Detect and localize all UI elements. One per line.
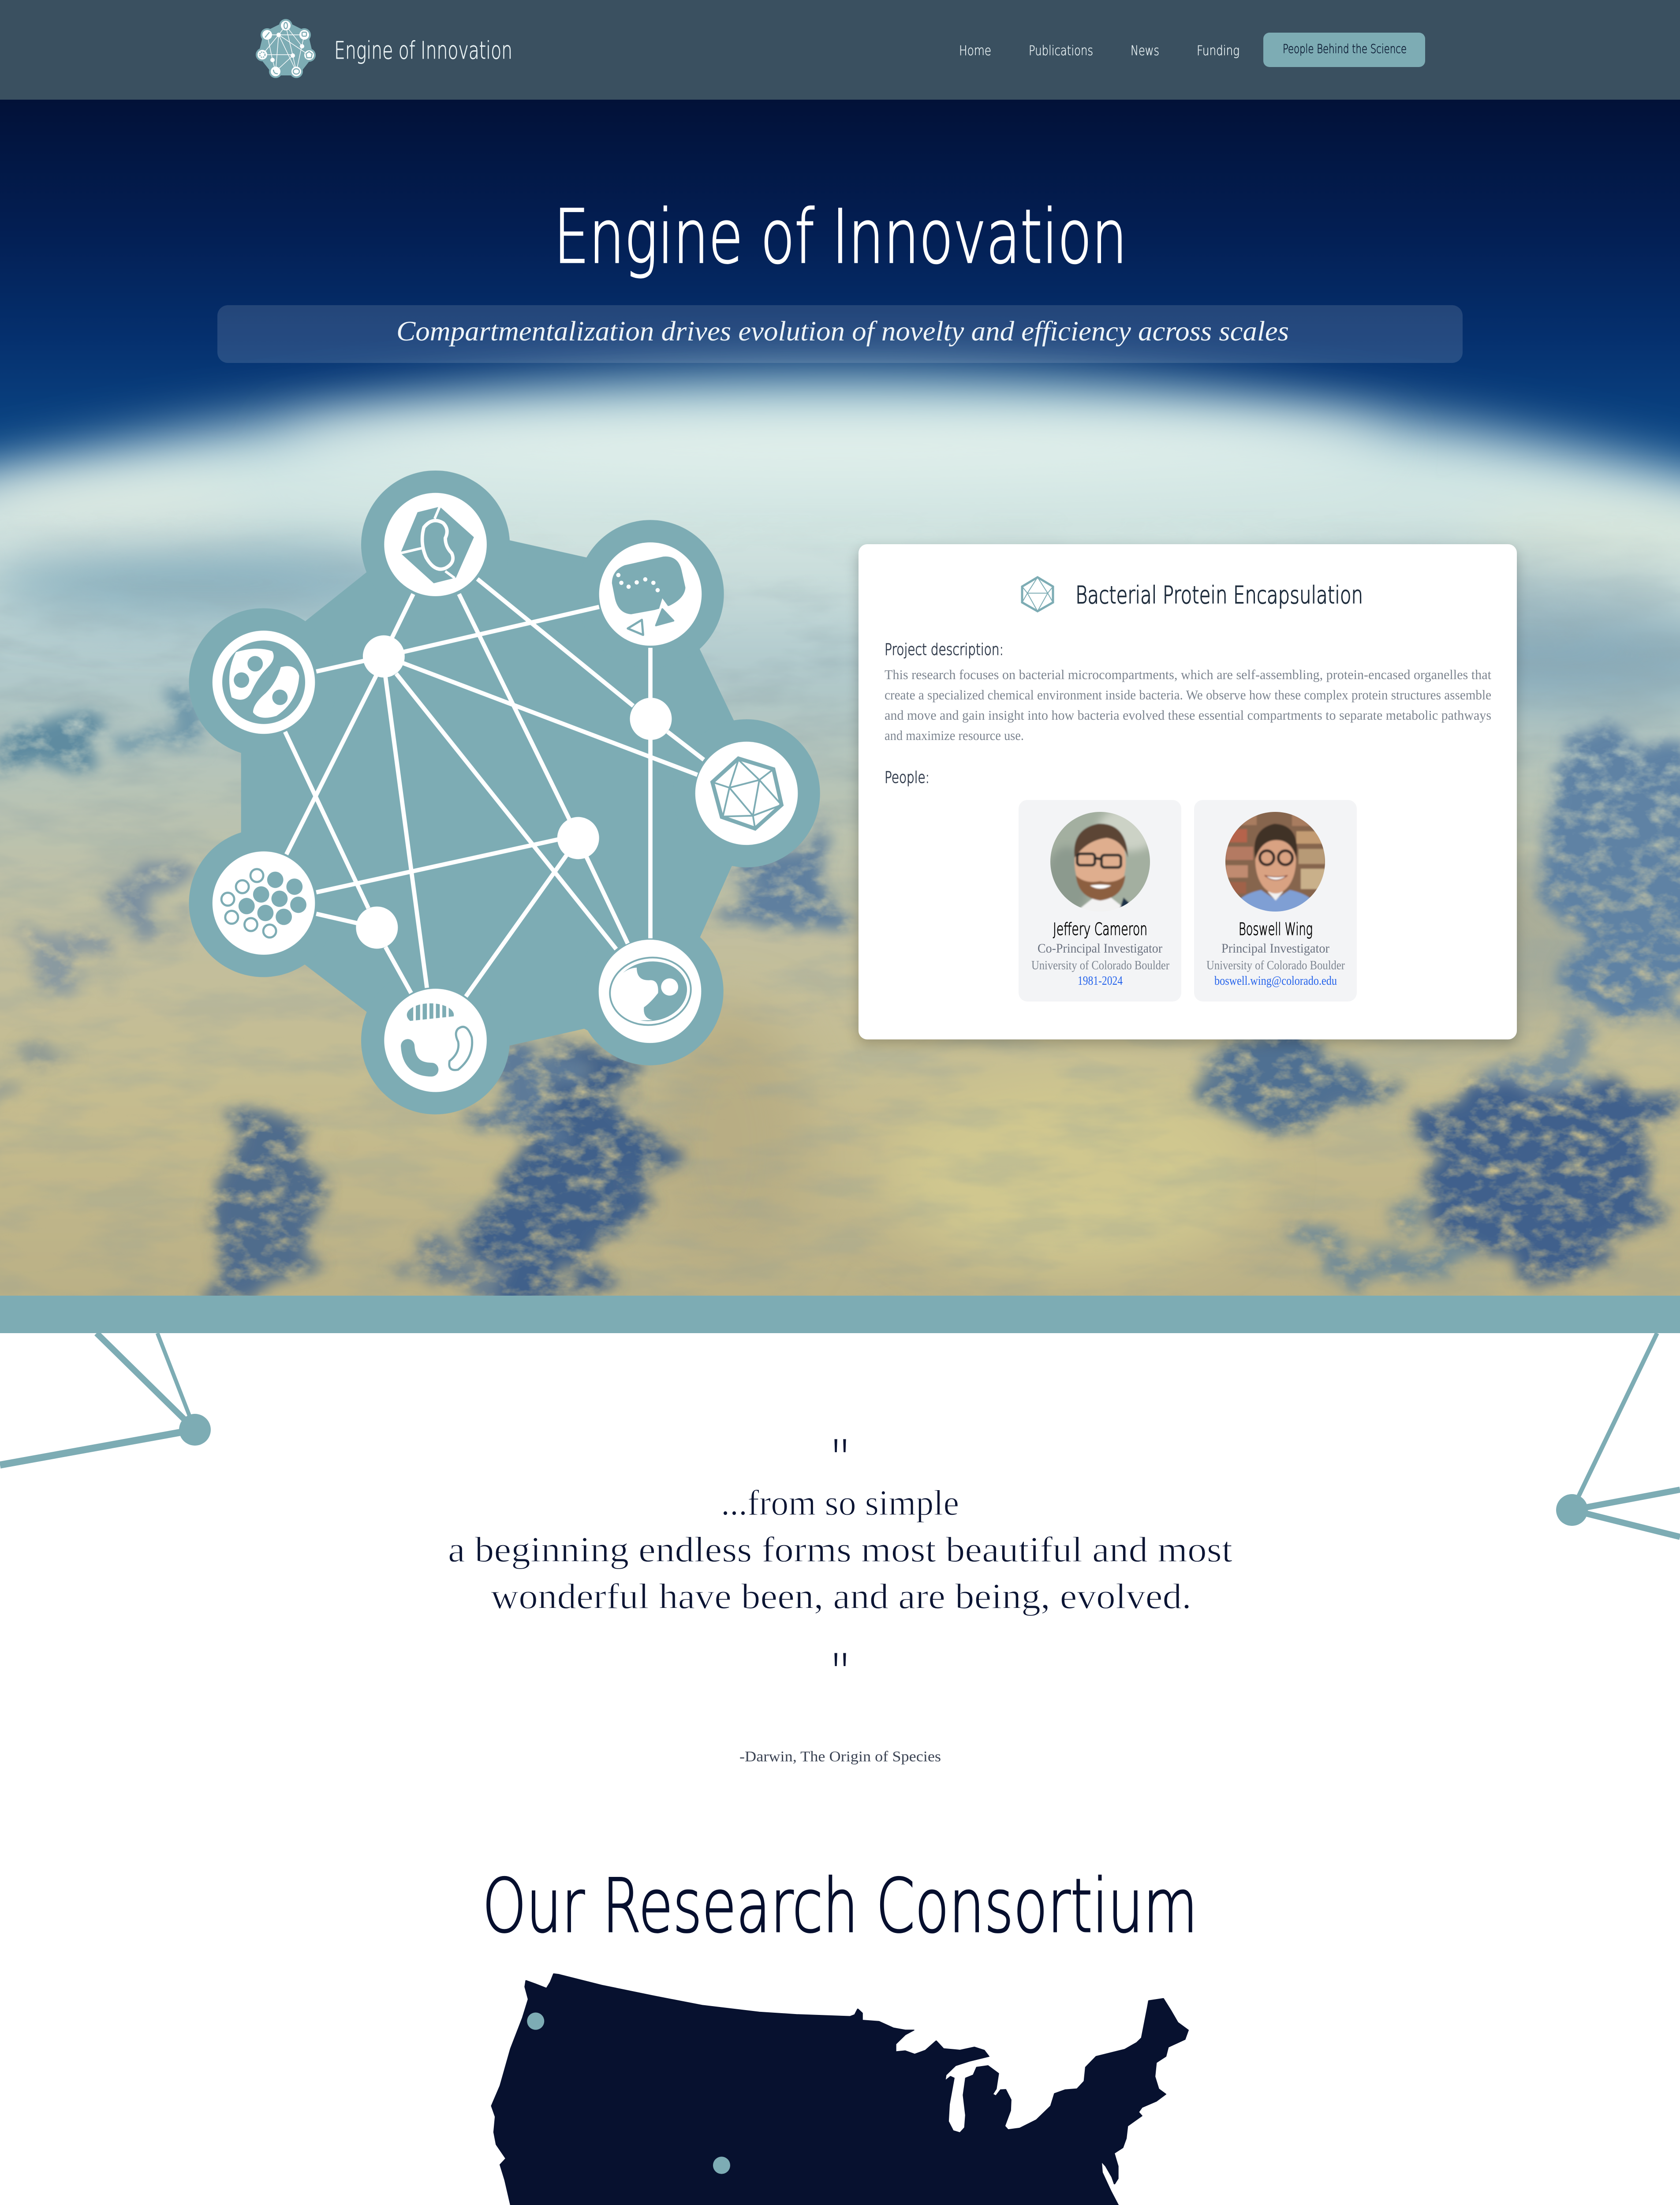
quote attribution: -Darwin, The Origin of Species <box>739 1749 941 1765</box>
person card: Boswell Wing <box>1194 800 1357 1002</box>
icon: cluster of vesicles <box>213 852 315 955</box>
project description text: create a specialized chemical environment inside bacteria. We observe how these complex protein structures assemble <box>885 687 1491 703</box>
people button <box>1263 33 1425 67</box>
navigation links: Funding <box>1197 43 1239 59</box>
navigation links: Publications <box>1029 43 1093 59</box>
map of United States with institution dots <box>492 1974 1188 2205</box>
opening quote mark: " <box>832 1423 849 1502</box>
consortium heading: Our Research Consortium <box>482 1863 1198 1949</box>
person name: Jeffery Cameron <box>1053 919 1147 939</box>
diagram hub nodes <box>356 635 672 949</box>
navigation links: Home <box>959 43 991 59</box>
project description text <box>885 667 1491 743</box>
closing quote mark: " <box>832 1637 849 1715</box>
quote text: wonderful have been, and are being, evolved. <box>491 1576 1191 1616</box>
icon: cell with nucleus <box>599 940 701 1043</box>
project description text: and move and gain insight into how bacteria evolved these essential compartments to separate metabolic pathways <box>885 707 1491 723</box>
person role: Co-Principal Investigator <box>1038 941 1162 956</box>
header logo icon <box>256 19 316 78</box>
person institution: University of Colorado Boulder <box>1206 959 1345 972</box>
people heading: People: <box>885 769 930 787</box>
header site name: Engine of Innovation <box>334 37 512 64</box>
quote text: a beginning endless forms most beautiful and most <box>448 1529 1232 1570</box>
portrait: Boswell Wing <box>1221 809 1329 915</box>
project info card <box>859 544 1517 1039</box>
navigation links <box>959 43 1239 59</box>
hero title: Engine of Innovation <box>554 194 1127 280</box>
Darwin quote <box>448 1423 1232 1765</box>
icon: icosahedron <box>1022 577 1053 611</box>
decorative network nodes right <box>1556 1333 1680 1537</box>
person institution: University of Colorado Boulder <box>1031 959 1170 972</box>
project description text: and maximize resource use. <box>885 728 1024 743</box>
project description heading: Project description: <box>885 641 1004 659</box>
people button: People Behind the Science <box>1283 41 1407 56</box>
person card: Jeffery Cameron <box>1019 800 1181 1002</box>
diagram teal backdrop <box>189 471 820 1114</box>
map silhouette <box>492 1974 1188 2205</box>
icon: vesicle with dots and triangles <box>599 542 702 646</box>
portrait: Jeffery Cameron <box>1045 807 1160 917</box>
teal divider band <box>0 1296 1680 1333</box>
network diagram of seven compartments <box>189 471 820 1114</box>
diagram connecting lines <box>285 579 704 997</box>
hero tagline panel <box>217 305 1463 363</box>
person email: boswell.wing@colorado.edu <box>1214 974 1337 988</box>
icon: cell with striped organelle <box>384 989 487 1092</box>
card title: Bacterial Protein Encapsulation <box>1075 581 1363 609</box>
header bar <box>0 0 1680 100</box>
person role: Principal Investigator <box>1221 941 1329 956</box>
icon: dividing cell <box>213 631 315 734</box>
hero tagline panel: Compartmentalization drives evolution of novelty and efficiency across scales <box>396 315 1289 347</box>
navigation links: News <box>1131 43 1159 59</box>
icon: icosahedral protein shell <box>695 742 798 845</box>
person dates: 1981-2024 <box>1078 974 1123 988</box>
project description text: This research focuses on bacterial microcompartments, which are self-assembling, protein-encased organelles that <box>885 667 1491 682</box>
hero background: earth from high altitude <box>0 100 1680 1367</box>
person name: Boswell Wing <box>1239 919 1313 939</box>
icon: microcompartment in polyhedron <box>384 493 487 596</box>
quote text <box>448 1483 1232 1616</box>
institution location dots <box>527 2012 1004 2205</box>
decorative network nodes left <box>0 1333 211 1465</box>
quote text: ...from so simple <box>721 1483 959 1523</box>
